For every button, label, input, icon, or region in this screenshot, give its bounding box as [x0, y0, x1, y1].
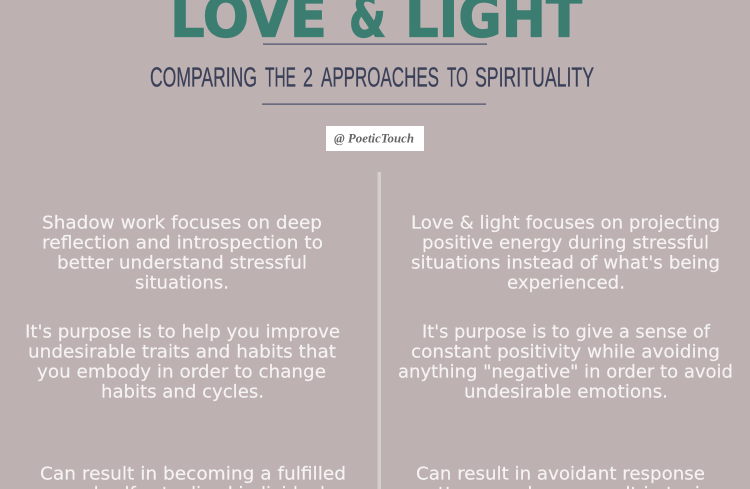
text block: love and light purpose: undesirable emotions. — [464, 382, 668, 402]
title — [170, 0, 582, 50]
text block: shadow work focus: reflection and introspection to — [42, 234, 323, 254]
centre divider — [378, 172, 381, 489]
left column: shadow work — [25, 214, 346, 489]
text block: shadow work purpose: you embody in order to change — [37, 362, 326, 382]
text block: love and light focus — [411, 214, 720, 294]
subtitle: COMPARING — [150, 62, 257, 92]
text block: love and light purpose: anything "negative" in order to avoid — [398, 362, 733, 382]
text block: love and light focus: Love & light focuses on projecting — [411, 214, 720, 234]
text block: shadow work purpose — [25, 322, 340, 402]
text block: shadow work focus: better understand stressful — [57, 254, 307, 274]
text block: love and light focus: positive energy during stressful — [422, 234, 709, 254]
text block: shadow work result: Can result in becoming a fulfilled — [40, 464, 346, 484]
badge: @PoeticTouch: @ PoeticTouch — [334, 130, 414, 146]
subtitle: SPIRITUALITY — [475, 62, 594, 92]
right column: love and light — [398, 214, 733, 489]
text block: shadow work purpose: undesirable traits and habits that — [28, 342, 336, 362]
subtitle: THE — [265, 62, 296, 92]
text block: love and light focus: experienced. — [507, 274, 625, 294]
subtitle: 2 — [303, 62, 313, 92]
text block: shadow work focus: situations. — [135, 274, 229, 294]
subtitle: APPROACHES — [321, 62, 439, 92]
text block: love and light focus: situations instead of what's being — [411, 254, 720, 274]
text block: shadow work purpose: It's purpose is to help you improve — [25, 322, 340, 342]
badge: @PoeticTouch — [326, 126, 424, 151]
text block: love and light purpose — [398, 322, 733, 402]
text block: shadow work focus — [42, 214, 323, 294]
subtitle: TO — [447, 62, 468, 92]
text block: love and light purpose: It's purpose is to give a sense of — [422, 322, 711, 342]
subtitle — [150, 62, 594, 92]
text block: love and light purpose: constant positivity while avoiding — [411, 342, 720, 362]
text block: shadow work purpose: habits and cycles. — [101, 382, 264, 402]
text block: love and light result: Can result in avoidant response — [416, 464, 705, 484]
text block: shadow work focus: Shadow work focuses on deep — [42, 214, 322, 234]
